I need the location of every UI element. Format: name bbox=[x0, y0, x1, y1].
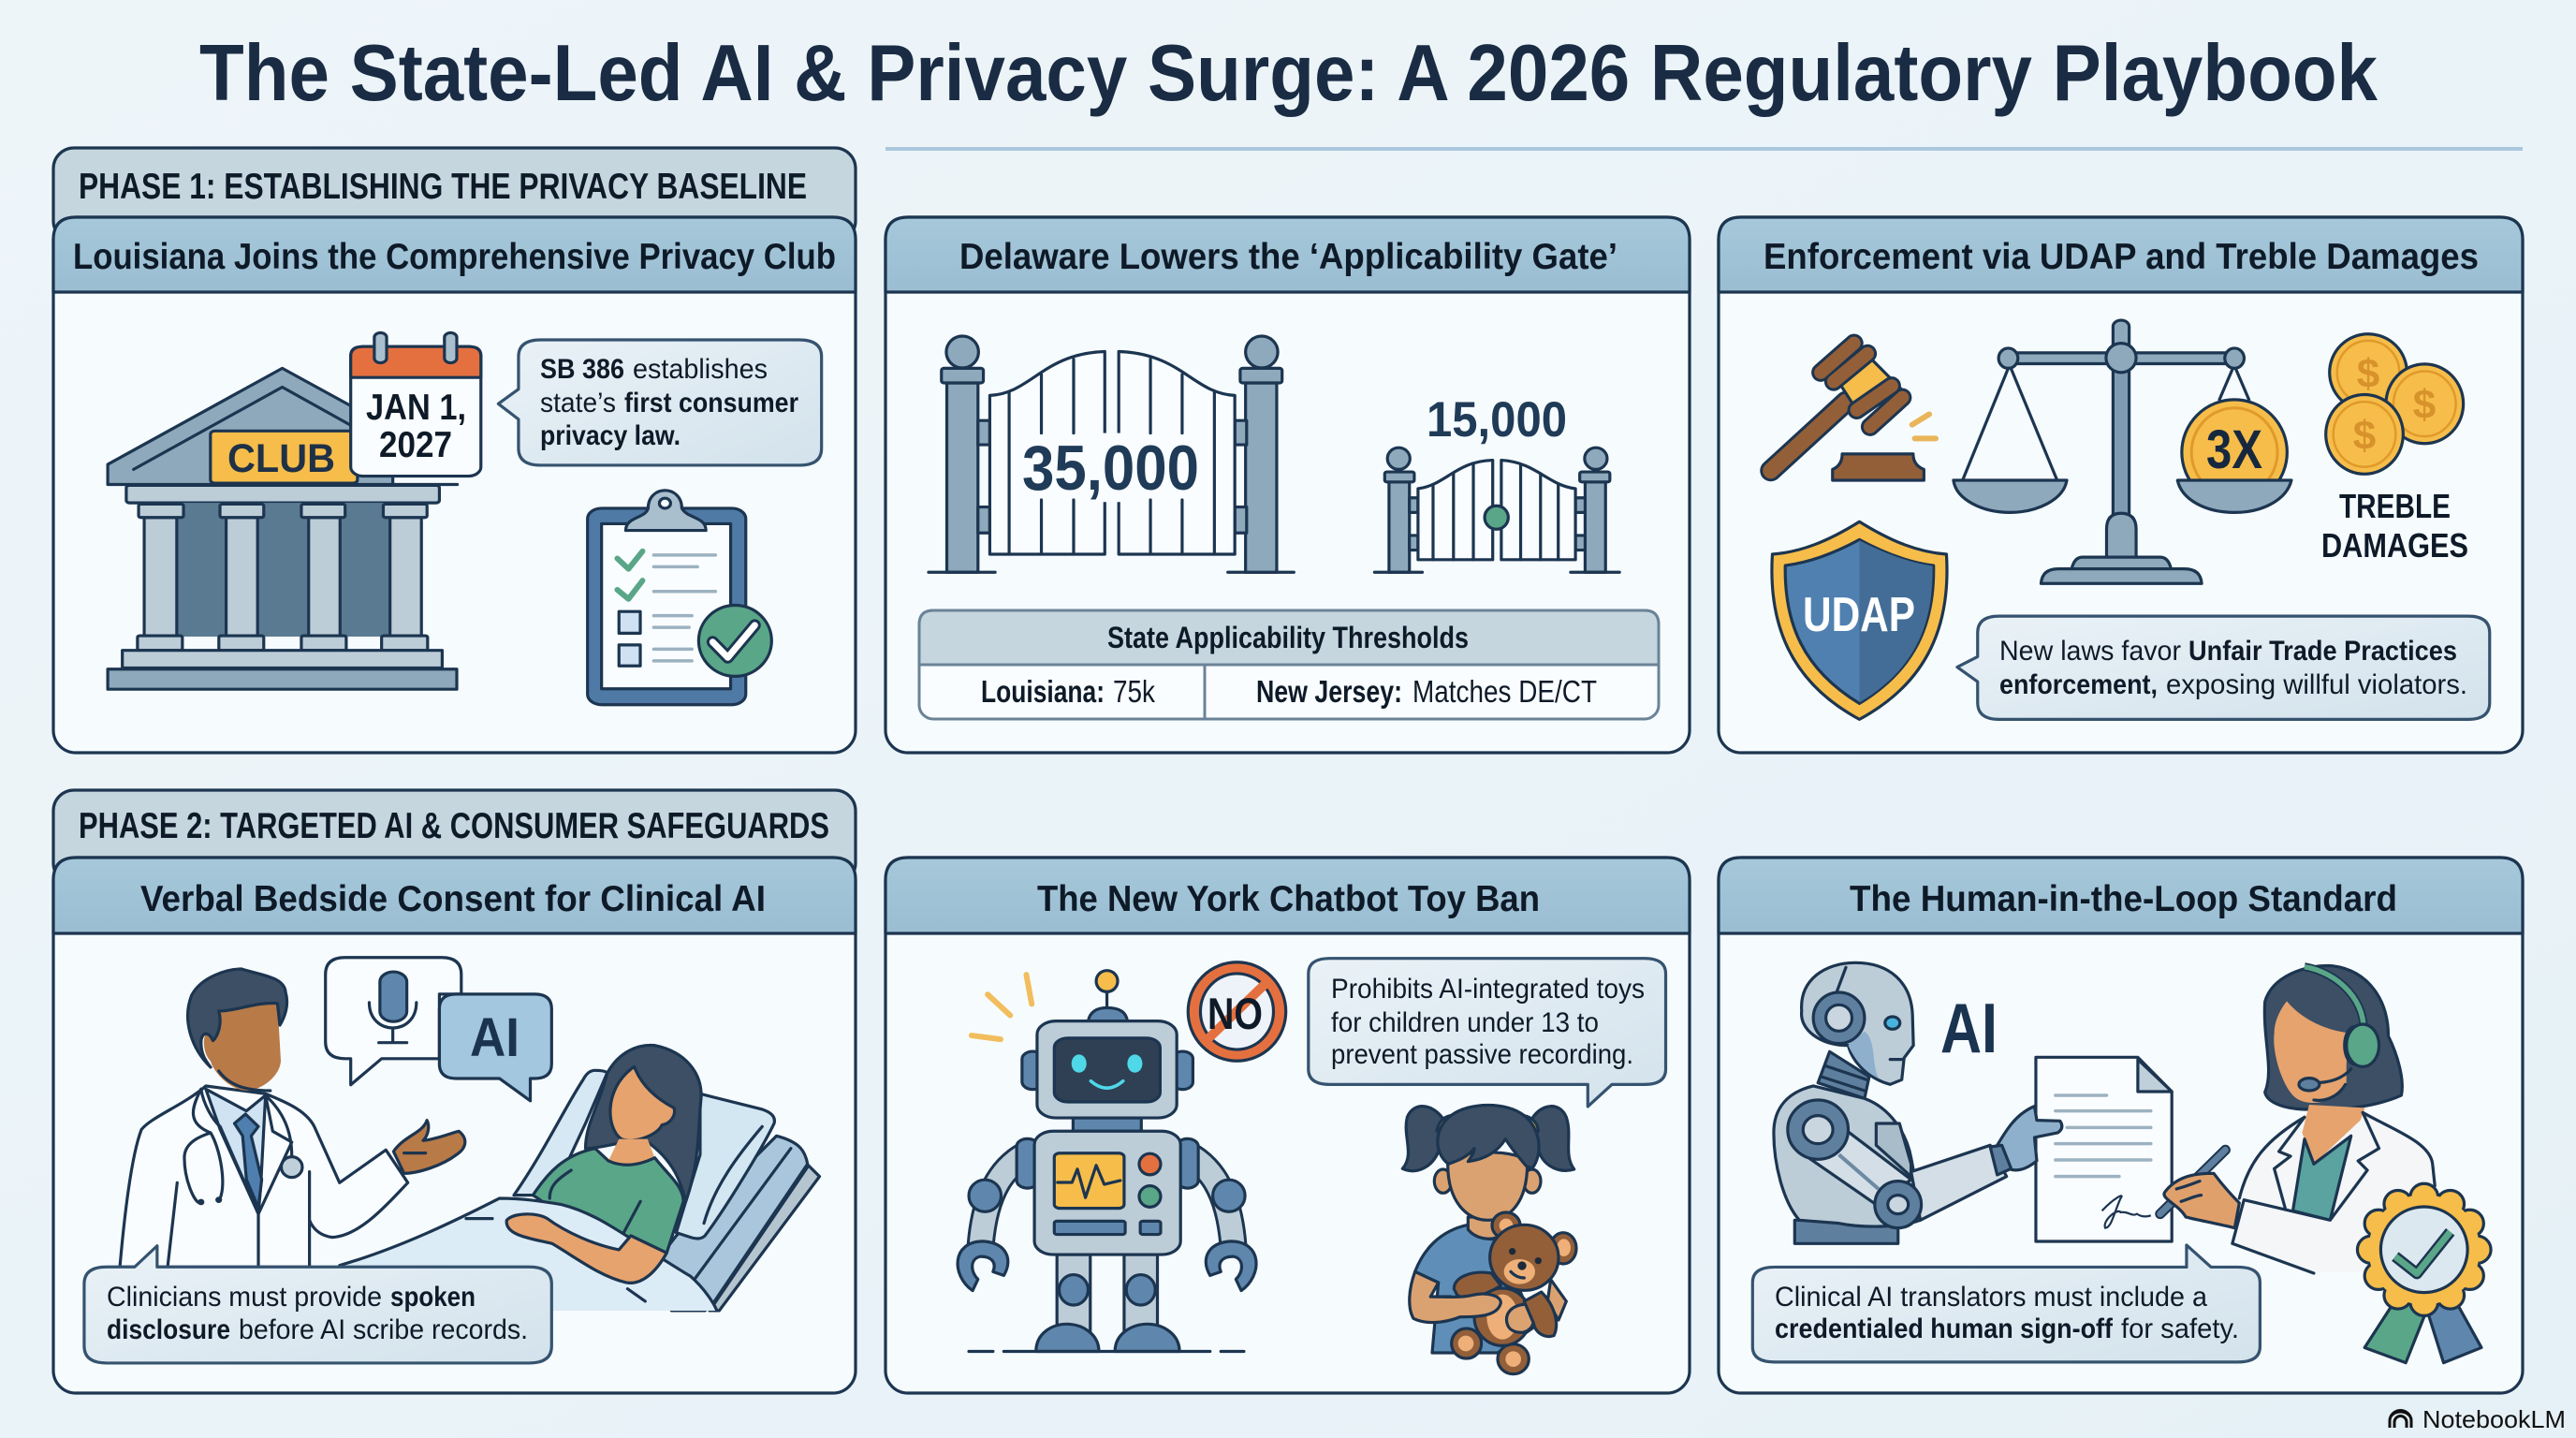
callout: SB 386 bbox=[498, 340, 822, 465]
table: state thresholds: Matches DE/CT bbox=[1412, 674, 1597, 709]
icon: small gate bbox=[1374, 448, 1619, 572]
callout: SB 386: state’s bbox=[540, 388, 616, 418]
calendar date: 2027 bbox=[379, 425, 452, 465]
header: Verbal consent bbox=[53, 858, 856, 933]
panel: NY toy ban bbox=[886, 858, 1690, 1393]
callout: toy ban: prevent passive recording. bbox=[1331, 1039, 1633, 1070]
callout: SB 386: first consumer bbox=[624, 388, 798, 418]
header: Delaware: Delaware Lowers the ‘Applicability Gate’ bbox=[959, 237, 1617, 277]
callout: toy ban: Prohibits AI-integrated toys bbox=[1331, 974, 1645, 1005]
panel: Verbal consent bbox=[53, 858, 856, 1393]
callout: UDAP enforcement bbox=[1957, 616, 2490, 719]
callout: toy ban bbox=[1309, 959, 1666, 1107]
callout: spoken disclosure: spoken bbox=[390, 1282, 476, 1313]
calendar date: JAN 1, bbox=[366, 388, 466, 428]
callout: human sign-off: credentialed human sign-off bbox=[1775, 1313, 2114, 1344]
callout: UDAP enforcement: New laws favor bbox=[1999, 636, 2181, 667]
illustration: patient in bed bbox=[340, 1045, 820, 1311]
icon: UDAP shield bbox=[1772, 521, 1947, 719]
icon: UDAP shield: UDAP bbox=[1803, 588, 1915, 642]
bubble: AI: AI bbox=[470, 1007, 520, 1068]
bubble: AI bbox=[439, 994, 551, 1101]
callout: spoken disclosure bbox=[84, 1246, 551, 1363]
header: NY toy ban bbox=[886, 858, 1690, 933]
label: treble damages: TREBLE bbox=[2339, 487, 2451, 525]
title: The State-Led AI & Privacy Surge: A 2026 Regulatory Playbook bbox=[199, 29, 2378, 118]
icon: coins bbox=[2326, 334, 2464, 474]
label: treble damages bbox=[2321, 487, 2468, 565]
panel: Human in the loop bbox=[1719, 858, 2523, 1393]
icon: gavel bbox=[1771, 344, 1936, 480]
icon: coins: $ bbox=[2413, 382, 2436, 428]
table: state thresholds: State Applicability Thresholds bbox=[1107, 621, 1469, 654]
icon: clipboard checklist bbox=[588, 491, 771, 705]
label: treble damages: DAMAGES bbox=[2321, 526, 2468, 565]
header: Delaware bbox=[886, 217, 1690, 292]
phase 2 tab: PHASE 2: TARGETED AI & CONSUMER SAFEGUARDS bbox=[79, 806, 829, 846]
header: Louisiana bbox=[53, 217, 856, 292]
callout: SB 386: privacy law. bbox=[540, 420, 681, 451]
watermark: NotebookLM: NotebookLM bbox=[2422, 1405, 2566, 1433]
icon: NO prohibition sign bbox=[1188, 962, 1286, 1061]
callout: toy ban: for children under 13 to bbox=[1331, 1007, 1599, 1038]
phase 1 tab: PHASE 1: ESTABLISHING THE PRIVACY BASELINE bbox=[79, 167, 807, 207]
phase 2 tab bbox=[53, 790, 856, 884]
illustration: clinician signing bbox=[2160, 966, 2435, 1273]
bubble: microphone bbox=[326, 958, 461, 1085]
callout: UDAP enforcement: enforcement, bbox=[1999, 669, 2158, 700]
illustration: toy robot bbox=[958, 971, 1256, 1352]
callout: UDAP enforcement: exposing willful violators. bbox=[2166, 669, 2467, 700]
calendar date bbox=[366, 388, 466, 465]
callout: human sign-off: for safety. bbox=[2121, 1313, 2239, 1344]
icon: approval rosette bbox=[2357, 1183, 2491, 1363]
label: AI: AI bbox=[1940, 989, 1998, 1067]
callout: UDAP enforcement: Unfair Trade Practices bbox=[2188, 636, 2457, 667]
callout: SB 386: SB 386 bbox=[540, 354, 624, 385]
icon: coins: $ bbox=[2353, 413, 2376, 459]
header: Louisiana: Louisiana Joins the Comprehensive Privacy Club bbox=[73, 237, 836, 277]
panel: Enforcement bbox=[1719, 217, 2523, 753]
header: Verbal consent: Verbal Bedside Consent for Clinical AI bbox=[140, 879, 766, 919]
table: state thresholds: New Jersey: bbox=[1256, 674, 1402, 709]
header: Human in the loop: The Human-in-the-Loop Standard bbox=[1850, 879, 2397, 919]
callout: human sign-off bbox=[1752, 1245, 2260, 1362]
phase 1 tab bbox=[53, 148, 856, 242]
table: state thresholds: 75k bbox=[1113, 674, 1155, 709]
callout: spoken disclosure: Clinicians must provide bbox=[107, 1282, 382, 1313]
header: Human in the loop bbox=[1719, 858, 2523, 933]
sign text: CLUB: CLUB bbox=[227, 436, 335, 481]
callout: SB 386: establishes bbox=[633, 354, 768, 385]
panel: Louisiana bbox=[53, 217, 856, 753]
gate number: 15,000: 15,000 bbox=[1427, 392, 1567, 448]
panel: Delaware bbox=[886, 217, 1690, 753]
table: state thresholds: Louisiana: bbox=[981, 674, 1105, 709]
illustration: AI robot bbox=[1774, 962, 2062, 1243]
header: NY toy ban: The New York Chatbot Toy Ban bbox=[1037, 879, 1540, 919]
icon: balance scale bbox=[1954, 320, 2291, 583]
illustration: child with teddy bear bbox=[1402, 1105, 1576, 1374]
table: state thresholds bbox=[919, 610, 1659, 719]
callout: human sign-off: Clinical AI translators must include a bbox=[1775, 1282, 2207, 1313]
illustration: document bbox=[2036, 1057, 2172, 1241]
callout: spoken disclosure: disclosure bbox=[107, 1314, 230, 1345]
header: Enforcement bbox=[1719, 217, 2523, 292]
icon: large gate bbox=[929, 336, 1294, 572]
icon: club building bbox=[108, 368, 458, 689]
gate number: 35,000: 35,000 bbox=[1022, 433, 1199, 504]
icon: NO prohibition sign: NO bbox=[1208, 989, 1263, 1038]
illustration: doctor bbox=[120, 969, 465, 1267]
header: Enforcement: Enforcement via UDAP and Treble Damages bbox=[1764, 237, 2479, 277]
icon: coins: $ bbox=[2357, 351, 2379, 397]
callout: spoken disclosure: before AI scribe records. bbox=[239, 1314, 528, 1345]
icon: calendar bbox=[351, 332, 481, 477]
coin label: 3X: 3X bbox=[2206, 419, 2262, 480]
